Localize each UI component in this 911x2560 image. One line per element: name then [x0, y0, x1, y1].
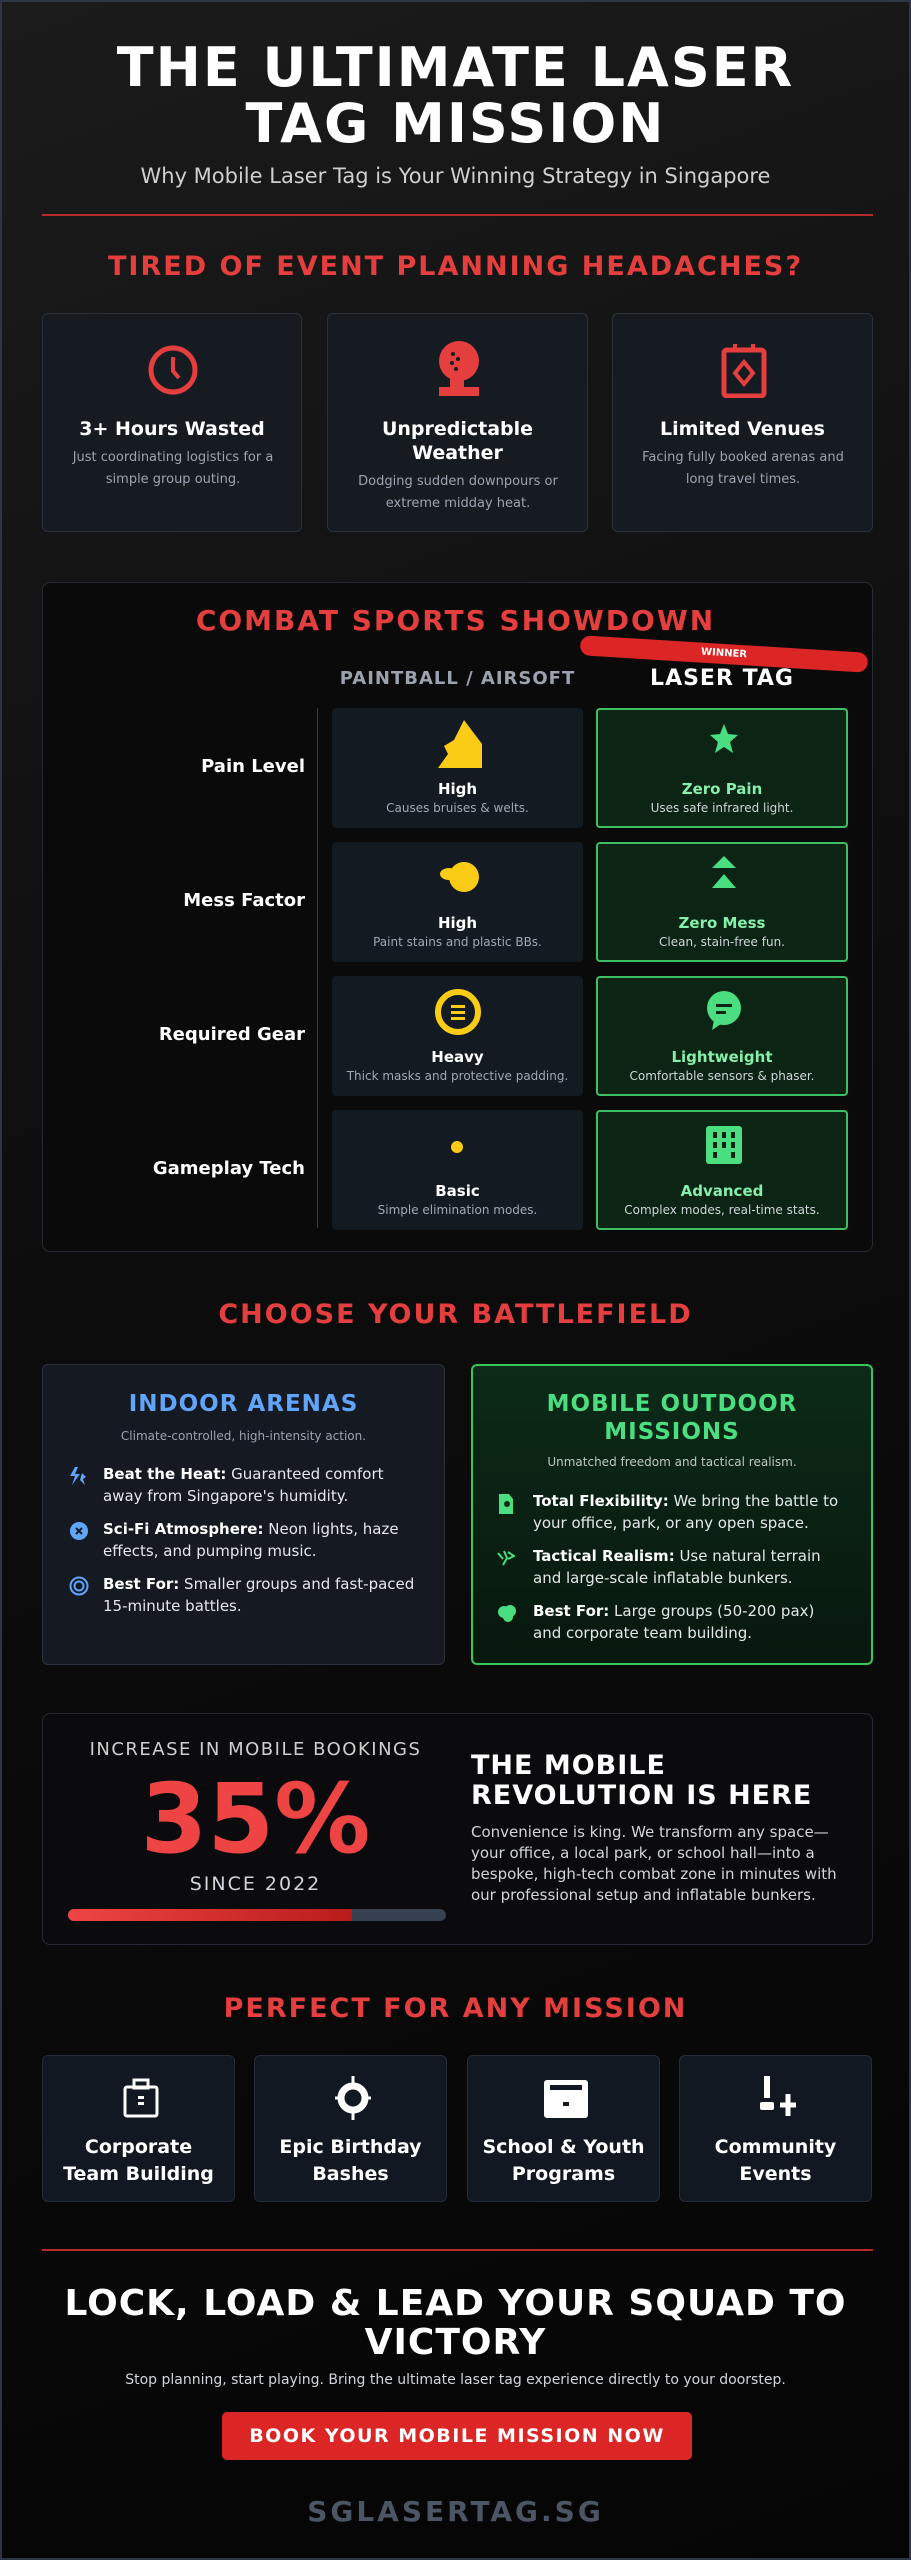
card: community: Community	[715, 2136, 836, 2158]
stat label: INCREASE IN MOBILE BOOKINGS	[90, 1739, 421, 1760]
card: birthday: Epic Birthday	[279, 2136, 422, 2158]
row: required gear: Required Gear	[159, 1024, 305, 1045]
icon: yellow burst	[438, 720, 482, 768]
row: mess factor	[183, 842, 848, 962]
row: required gear	[159, 976, 848, 1096]
icon: green bubble	[707, 991, 741, 1030]
card: school: Programs	[512, 2163, 615, 2185]
icon: weather	[439, 341, 479, 396]
card: venues: Facing fully booked arenas and long travel times.	[642, 450, 844, 487]
card: corporate: Team Building	[63, 2163, 214, 2185]
row: pain level: Causes bruises & welts.	[386, 801, 529, 815]
panel: indoor arenas: Climate-controlled, high-intensity action.	[121, 1429, 366, 1443]
ribbon: winner	[580, 635, 868, 673]
row: gameplay tech: Complex modes, real-time stats.	[624, 1203, 820, 1217]
card: hours wasted	[42, 313, 302, 532]
row: required gear: Lightweight	[671, 1048, 773, 1066]
card: school	[467, 2055, 660, 2202]
card: venues	[612, 313, 873, 532]
card: birthday	[254, 2055, 447, 2202]
item: best for outdoor: Best For: Large groups (50-200 pax) and corporate team building.	[533, 1602, 814, 1642]
panel: combat sports showdown	[42, 582, 873, 1252]
panel: problem cards	[42, 313, 873, 532]
item: beat the heat: Beat the Heat: Guaranteed comfort away from Singapore's humidity.	[103, 1465, 384, 1505]
card: corporate: Corporate	[85, 2136, 192, 2158]
card: weather	[327, 313, 588, 532]
row: required gear: Comfortable sensors & phaser.	[630, 1069, 814, 1083]
row: gameplay tech	[153, 1110, 848, 1230]
row: gameplay tech: Basic	[435, 1182, 480, 1200]
text: revolution body: Convenience is king. We transform any space—your office, a local park, or school hall—into a bespoke, high-tech combat zone in minutes with our professional setup and inflatable bunkers.	[471, 1823, 837, 1904]
footer: brand: SGLASERTAG.SG	[307, 2495, 604, 2528]
icon: calendar	[722, 344, 766, 398]
panel: mobile outdoor: MOBILE OUTDOOR	[547, 1391, 797, 1417]
item: tactical realism: Tactical Realism: Use natural terrain and large-scale inflatable bunkers.	[533, 1547, 821, 1587]
panel: mobile outdoor	[471, 1364, 873, 1665]
card: birthday: Bashes	[312, 2163, 389, 2185]
stat: 35%: 35%	[141, 1763, 370, 1875]
title	[117, 36, 794, 155]
ribbon: winner: WINNER	[701, 647, 747, 660]
heading: mobile revolution: THE MOBILE	[471, 1750, 666, 1781]
row: gameplay tech: Advanced	[681, 1182, 763, 1200]
icon: green arrows	[712, 856, 736, 888]
progress bar	[68, 1909, 446, 1921]
title: THE ULTIMATE LASER	[117, 36, 794, 99]
row: pain level: High	[438, 780, 477, 798]
row: mess factor: Mess Factor	[183, 890, 305, 911]
row: gameplay tech: Simple elimination modes.	[378, 1203, 537, 1217]
panel: mobile outdoor: MISSIONS	[604, 1419, 740, 1445]
header: paintball: PAINTBALL / AIRSOFT	[340, 668, 575, 689]
card: weather: Weather	[412, 442, 503, 464]
icon: yellow splat	[440, 862, 479, 892]
item: best for indoor: Best For: Smaller groups and fast-paced 15-minute battles.	[103, 1575, 414, 1615]
icon: green star	[710, 724, 738, 753]
row: mess factor: Clean, stain-free fun.	[659, 935, 785, 949]
header: laser tag: LASER TAG	[650, 666, 794, 691]
button: book: BOOK YOUR MOBILE MISSION NOW	[249, 2425, 665, 2447]
card: community	[679, 2055, 872, 2202]
title: TAG MISSION	[246, 92, 665, 155]
card: community: Events	[739, 2163, 812, 2185]
panel: stats: SINCE 2022	[190, 1873, 321, 1895]
heading: headaches: TIRED OF EVENT PLANNING HEADACHES?	[108, 251, 803, 282]
card: hours wasted: 3+ Hours Wasted	[79, 418, 265, 440]
row: pain level: Uses safe infrared light.	[651, 801, 793, 815]
row: mess factor: Zero Mess	[679, 914, 765, 932]
row: required gear: Heavy	[431, 1048, 484, 1066]
row: pain level: Pain Level	[201, 756, 305, 777]
heading: call to action: VICTORY	[365, 2322, 546, 2363]
heading: battlefield: CHOOSE YOUR BATTLEFIELD	[218, 1299, 693, 1330]
icon: clock	[148, 346, 198, 394]
item: flexibility: Total Flexibility: We bring the battle to your office, park, or any open space.	[533, 1492, 838, 1532]
heading: mobile revolution	[471, 1750, 812, 1811]
item: sci-fi: Sci-Fi Atmosphere: Neon lights, haze effects, and pumping music.	[103, 1520, 399, 1560]
row: pain level: Zero Pain	[682, 780, 762, 798]
panel: stats	[42, 1713, 873, 1945]
card: venues: Limited Venues	[660, 418, 825, 440]
icon: yellow dot	[451, 1141, 463, 1153]
panel: indoor arenas	[42, 1364, 445, 1665]
card: weather: Unpredictable	[382, 418, 533, 440]
heading: mobile revolution: REVOLUTION IS HERE	[471, 1780, 812, 1811]
heading: call to action	[64, 2283, 847, 2363]
row: gameplay tech: Gameplay Tech	[153, 1158, 305, 1179]
row: required gear: Thick masks and protective padding.	[347, 1069, 568, 1083]
row: mess factor: High	[438, 914, 477, 932]
heading: call to action: LOCK, LOAD & LEAD YOUR SQUAD TO	[64, 2283, 847, 2324]
icon: yellow ring	[435, 989, 481, 1035]
card: corporate	[42, 2055, 235, 2202]
text: cta sub: Stop planning, start playing. Bring the ultimate laser tag experience directly to your doorstep.	[125, 2372, 786, 2388]
icon: green grid	[706, 1126, 742, 1164]
row: pain level	[201, 708, 848, 828]
subtitle: Why Mobile Laser Tag is Your Winning Strategy in Singapore	[140, 164, 770, 188]
heading: perfect for any mission: PERFECT FOR ANY MISSION	[224, 1993, 687, 2024]
card: school: School & Youth	[482, 2136, 645, 2158]
row: mess factor: Paint stains and plastic BBs.	[373, 935, 542, 949]
panel: mobile outdoor: Unmatched freedom and tactical realism.	[547, 1455, 797, 1469]
panel: indoor arenas: INDOOR ARENAS	[129, 1391, 358, 1417]
card: hours wasted: Just coordinating logistics for a simple group outing.	[73, 450, 273, 487]
heading: showdown: COMBAT SPORTS SHOWDOWN	[196, 604, 715, 637]
button: book	[222, 2412, 692, 2460]
card: weather: Dodging sudden downpours or extreme midday heat.	[358, 474, 558, 511]
